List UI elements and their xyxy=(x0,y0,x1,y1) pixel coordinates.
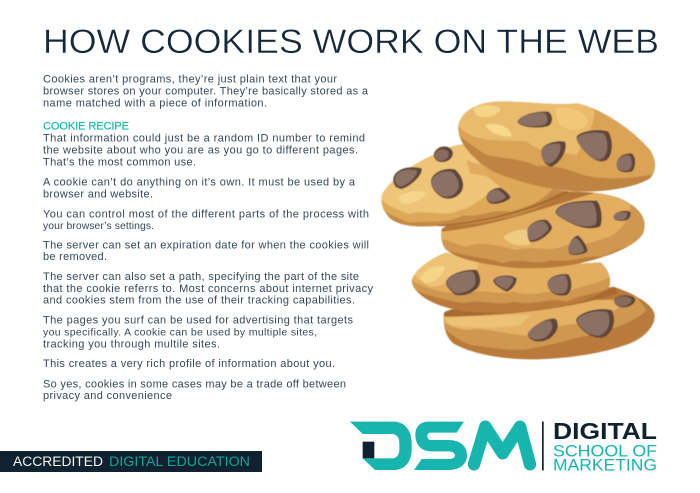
text block: advertising: The pages you surf can be used for advertising that targets xyxy=(43,314,354,326)
text block: path and privacy: that the cookie referrs to. Most concerns about internet privacy xyxy=(43,283,374,295)
text block: browser settings xyxy=(43,208,369,232)
footer banner: accredited digital education: DIGITAL EDUCATION xyxy=(109,454,250,469)
text block: expiration: The server can set an expiration date for when the cookies will xyxy=(43,239,369,251)
text block: random id: That information could just be a random ID number to remind xyxy=(43,133,365,145)
text block: trade off: privacy and convenience xyxy=(43,390,172,402)
heading: cookie recipe: COOKIE RECIPE xyxy=(43,121,129,133)
text block: intro xyxy=(43,74,369,110)
text block: advertising xyxy=(43,314,354,350)
cookie: bottom xyxy=(442,286,656,360)
cookie: fourth xyxy=(411,252,611,313)
logo text: MARKETING xyxy=(553,456,657,474)
text block: random id: the website about who you are as you go to different pages. xyxy=(43,145,358,157)
text block: advertising: you specifically. A cookie can be used by multiple sites, xyxy=(43,326,317,338)
cookie: top xyxy=(457,100,656,192)
logo: digital school of marketing xyxy=(350,418,657,474)
text block: path and privacy: and cookies stem from the use of their tracking capabilities. xyxy=(43,294,355,306)
cookie: left xyxy=(380,144,570,228)
text block: cookie use: A cookie can’t do anything on it’s own. It must be used by a xyxy=(43,177,356,189)
text block: cookie use: browser and website. xyxy=(43,188,153,200)
text block: rich profile: This creates a very rich profile of information about you. xyxy=(43,358,335,370)
footer banner: accredited digital education: ACCREDITED xyxy=(13,454,103,469)
text block: browser settings: your browser’s settings. xyxy=(43,221,154,232)
text block: intro: Cookies aren’t programs, they’re just plain text that your xyxy=(43,74,337,86)
footer banner: accredited digital education xyxy=(0,451,262,472)
logo mark: DSM xyxy=(350,422,530,470)
text block: cookie use xyxy=(43,177,356,200)
title: HOW COOKIES WORK ON THE WEB xyxy=(43,23,659,61)
text block: random id xyxy=(43,133,365,168)
text block: intro: name matched with a piece of information. xyxy=(43,98,267,110)
text block: trade off xyxy=(43,378,346,402)
logo text xyxy=(553,418,657,474)
logo text: DIGITAL xyxy=(553,418,657,444)
logo divider xyxy=(542,422,544,470)
logo text: SCHOOL OF xyxy=(553,443,657,461)
cookie: third xyxy=(437,190,650,273)
text block: expiration: be removed. xyxy=(43,251,107,263)
text block: path and privacy: The server can also set a path, specifying the part of the site xyxy=(43,271,359,283)
text block: random id: That’s the most common use. xyxy=(43,156,196,168)
text block: trade off: So yes, cookies in some cases may be a trade off between xyxy=(43,378,346,390)
text block: intro: browser stores on your computer. They’re basically stored as a xyxy=(43,86,369,98)
text block: browser settings: You can control most of the different parts of the process with xyxy=(43,208,369,220)
text block: expiration xyxy=(43,239,369,263)
text block: advertising: tracking you through multile sites. xyxy=(43,338,220,350)
text block: path and privacy xyxy=(43,271,374,306)
illustration: cookie stack xyxy=(377,97,663,363)
